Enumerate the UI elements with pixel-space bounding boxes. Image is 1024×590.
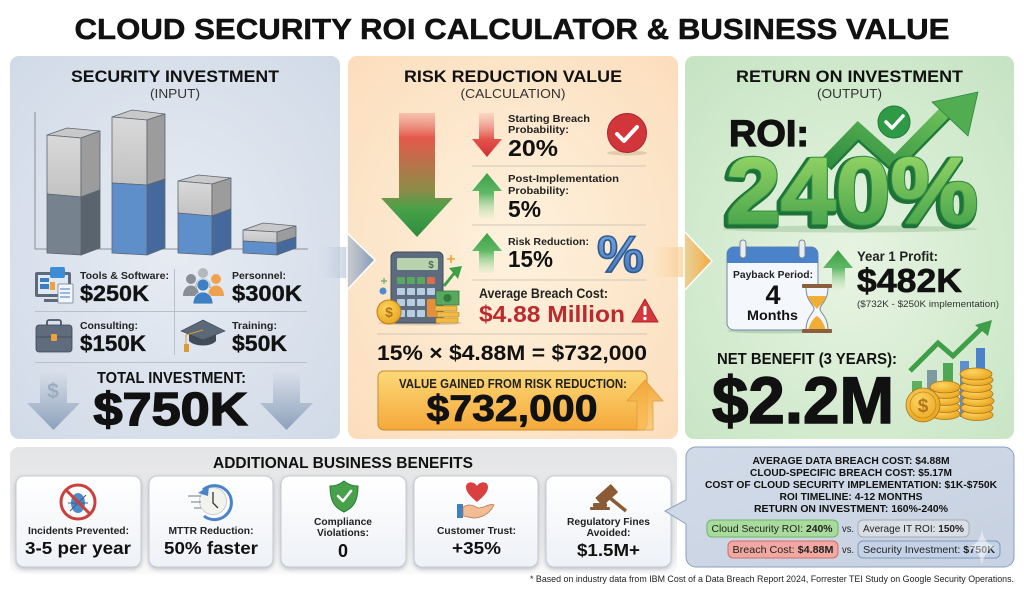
label: regulatory fines avoided [567,516,650,539]
icon: calculator [377,252,462,326]
stats list: RETURN ON INVESTMENT: 160%-240% [754,503,949,515]
heading: return on investment: RETURN ON INVESTMENT [736,67,964,86]
icon: hourglass [802,284,832,333]
icon: consulting briefcase [36,320,72,352]
label: roi: ROI: [729,113,809,154]
pill: average it roi: Average IT ROI: 150% [863,523,965,535]
pill: cloud security roi: Cloud Security ROI: 240% [712,523,833,535]
label: tools and software: Tools & Software: [80,270,169,282]
heading: security investment: SECURITY INVESTMENT [71,67,280,86]
label: post-implementation probability: Probability: [508,185,569,197]
chart: growth bars with coins [906,320,994,422]
label: total investment: TOTAL INVESTMENT: [97,370,246,387]
label: compliance violations: Compliance [314,516,372,528]
pill: security investment: Security Investment: $750K [863,544,995,556]
icon: shield [330,481,358,512]
value: 50 percent faster: 50% faster [164,538,258,558]
card: mttr reduction [149,476,273,567]
panel: additional business benefits [10,447,677,574]
icon: red check [607,114,647,156]
value: consulting: $150K [80,331,146,356]
arrow: flow into output [655,231,712,291]
label: personnel: Personnel: [232,270,286,282]
arrow: right down [260,372,313,430]
value: 732000: $732,000 [426,388,598,429]
pill: breach cost [728,541,838,558]
arrow: risk reduction up [472,233,502,273]
stats list: AVERAGE DATA BREACH COST: $4.88M [752,455,950,467]
icon: tools and software [35,267,73,303]
label: starting breach probability: Starting Breach [508,113,590,125]
pill: security investment [858,541,1000,558]
formula: 15% × $4.88M = $732,000 [377,342,647,365]
label: risk reduction: Risk Reduction: [508,236,589,248]
label: regulatory fines avoided: Regulatory Fines [567,516,650,528]
value: net benefit: $2.2M [712,363,894,437]
pill: average it roi [858,520,969,537]
icon: training graduation cap [181,320,225,352]
label: training: Training: [232,320,277,332]
sparkle watermark [967,530,997,565]
value: 4: 4 [765,280,781,310]
value: 15 percent: 15% [508,246,553,272]
heading: risk reduction value: RISK REDUCTION VALUE [404,67,622,86]
card: compliance violations [281,476,406,567]
label: average breach cost: Average Breach Cost: [479,286,608,301]
callout: value gained [378,371,663,430]
icon: gavel [590,484,626,511]
subheading: output: (OUTPUT) [817,86,882,101]
label: payback period: Payback Period: [733,269,813,281]
arrow: starting probability down [472,113,502,157]
icon: heart in hand [457,482,494,518]
value: training: $50K [232,331,287,356]
pill: cloud security roi [707,520,838,537]
arrow: left down with dollar: $ [47,380,59,403]
arrow: flow into calculation [315,233,375,290]
heading: additional business benefits: ADDITIONAL BUSINESS BENEFITS [213,455,473,472]
label: incidents prevented: Incidents Prevented: [28,525,129,537]
arrow: profit up [823,250,853,290]
chart: growth bars with coins: $ [918,396,929,417]
arrow: post-implementation up [472,173,502,218]
value: 240 percent: 240% [724,140,976,245]
stats list: ROI TIMELINE: 4-12 MONTHS [780,491,922,503]
stats list [705,455,997,515]
card: regulatory fines avoided [546,476,671,567]
panel: security investment [10,56,340,439]
card: incidents prevented [16,476,141,567]
label: starting breach probability [508,113,590,136]
value: total investment: $750K [94,383,248,435]
value: 4.88 million: $4.88 Million [479,301,625,327]
title: CLOUD SECURITY ROI CALCULATOR & BUSINESS VALUE [74,14,950,46]
value: tools and software: $250K [80,281,149,306]
icon: green check [878,106,910,138]
icon: clock [188,486,231,520]
label: year 1 profit: Year 1 Profit: [857,249,938,264]
label: compliance violations: Violations: [317,527,369,539]
subheading: calculation: (CALCULATION) [460,86,566,101]
bar chart: investment by category [35,110,308,255]
label: post-implementation probability [508,173,619,197]
arrow: value up [627,380,663,430]
text: versus: vs. [842,544,854,556]
arrow: big risk descent [381,113,453,237]
icon: warning triangle [632,299,658,322]
icon: calculator: $ [385,304,393,320]
value: 240 percent: 240% [726,138,978,243]
pill: breach cost: Breach Cost: $4.88M [732,544,834,556]
value: year 1 profit: $482K [857,262,962,299]
label: compliance violations [314,516,372,539]
text: versus: vs. [842,523,854,535]
panel: risk reduction value [348,56,678,439]
stats list: COST OF CLOUD SECURITY IMPLEMENTATION: $1K-$750K [705,479,997,491]
value: 20 percent: 20% [508,135,558,161]
icon: no bug [61,485,95,519]
arrow: left down with dollar [27,372,80,430]
value: 1.5M plus: $1.5M+ [577,540,640,560]
label: net benefit: NET BENEFIT (3 YEARS): [717,351,897,368]
value: personnel: $300K [232,281,302,306]
label: starting breach probability: Probability: [508,124,569,136]
footnote: * Based on industry data from IBM Cost of a Data Breach Report 2024, Forrester TEI Study on Google Security Operations. [530,574,1014,584]
label: mttr reduction: MTTR Reduction: [168,525,254,537]
value: 240 percent: 240% [726,138,978,243]
icon: calendar payback [727,240,823,334]
icon: percent sign: % [597,226,644,284]
card: customer trust [414,476,538,567]
value: 5 percent: 5% [508,196,541,222]
label: regulatory fines avoided: Avoided: [586,527,630,539]
label: post-implementation probability: Post-Implementation [508,173,619,185]
value: 0: 0 [338,541,348,561]
stats list: CLOUD-SPECIFIC BREACH COST: $5.17M [750,467,952,479]
label: customer trust: Customer Trust: [437,525,516,537]
note: profit calculation: ($732K - $250K implementation) [857,299,999,309]
label: value gained: VALUE GAINED FROM RISK REDUCTION: [399,377,627,391]
value: months: Months [747,307,798,323]
value: 3-5 per year: 3-5 per year [25,538,131,558]
subheading: input: (INPUT) [150,86,200,101]
icon: calculator: $ [428,260,434,271]
icon: personnel [183,268,224,304]
value: plus 35 percent: +35% [452,538,501,558]
label: consulting: Consulting: [80,320,138,332]
panel: return on investment [655,56,1014,439]
callout: data summary [665,447,1014,567]
arrow: rising growth [826,92,978,165]
